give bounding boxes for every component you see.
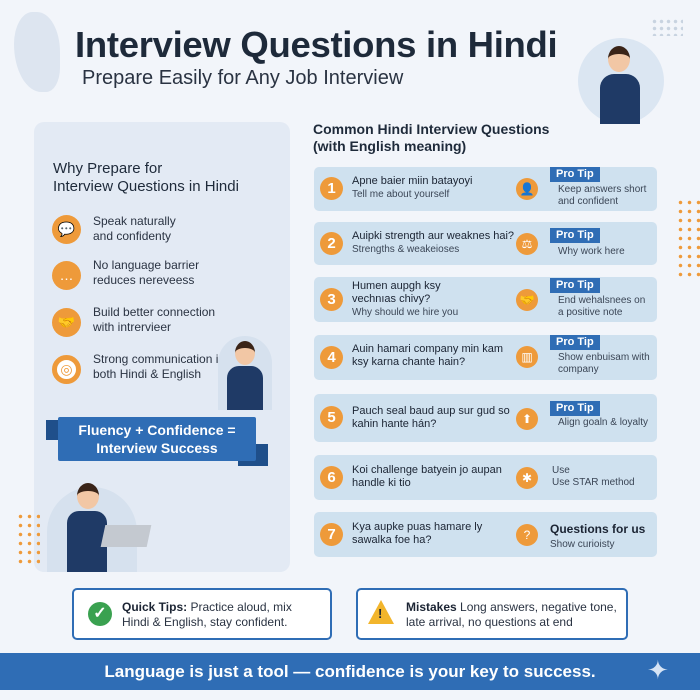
card 7: sawalka foe ha?: [352, 534, 432, 546]
card 3: Why should we hire you: [352, 307, 458, 318]
list item 2: [52, 258, 199, 290]
card 3: vechnıas chivy?: [352, 293, 430, 305]
card 6: Use STAR method: [552, 477, 635, 488]
banner: fluency + confidence: Fluency + Confidence =: [78, 422, 236, 438]
heading: common questions: Common Hindi Interview Questions: [313, 121, 549, 137]
card 3: 3: [327, 291, 336, 308]
card 1: Pro Tip: [556, 168, 594, 180]
icon: check: ✓: [93, 605, 107, 622]
illustration: woman presenter top right: [578, 38, 664, 124]
card 5: [314, 394, 657, 442]
list item 4: [52, 352, 225, 384]
card 4: Pro Tip: [556, 336, 594, 348]
card 2: Why work here: [558, 246, 625, 257]
card 7: Kya aupke puas hamare ly: [352, 521, 482, 533]
list item 1: 💬: [58, 221, 75, 237]
card 4: ▥: [521, 350, 533, 364]
card 6: 6: [327, 469, 336, 486]
icon: sparkle: ✦: [647, 655, 669, 685]
mistakes box: !: [378, 606, 382, 621]
card 1: 1: [327, 180, 336, 197]
subtitle: Prepare Easily for Any Job Interview: [82, 67, 403, 89]
quick tips box: [72, 588, 332, 640]
panel heading: Why Prepare for: [53, 160, 162, 177]
map shape top left: [14, 12, 60, 92]
card 4: company: [558, 364, 599, 375]
mistakes box: Mistakes Long answers, negative tone,: [406, 600, 617, 614]
card 5: ⬆: [522, 412, 532, 426]
dots decoration: [651, 18, 683, 36]
panel heading: [53, 160, 239, 195]
quick tips box: Quick Tips: Practice aloud, mix: [122, 600, 292, 614]
list item 4: Strong communication in: [93, 352, 225, 366]
illustration: man with laptop: [47, 487, 137, 572]
list item 3: Build better connection: [93, 305, 215, 319]
card 1: [314, 167, 657, 211]
panel heading: Interview Questions in Hindi: [53, 178, 239, 195]
list item 2: reduces nereveess: [93, 273, 194, 287]
banner: fluency + confidence: [46, 417, 268, 466]
card 7: ?: [524, 528, 530, 542]
card 6: ✱: [522, 471, 532, 485]
card 4: Show enbuisam with: [558, 352, 650, 363]
card 3: a positive note: [558, 307, 622, 318]
icon: check: [88, 602, 112, 626]
icon: warning: [368, 600, 394, 624]
mistakes box: late arrival, no questions at end: [406, 615, 573, 629]
card 2: ⚖: [522, 237, 532, 251]
card 2: Pro Tip: [556, 229, 594, 241]
card 6: handle ki tio: [352, 477, 411, 489]
card 2: [314, 222, 657, 265]
card 7: 7: [327, 526, 336, 543]
card 4: ksy karna chante hain?: [352, 356, 465, 368]
card 4: Auin hamari company min kam: [352, 343, 503, 355]
quick tips box: Hindi & English, stay confident.: [122, 615, 287, 629]
card 2: Strengths & weakeioses: [352, 244, 459, 255]
card 6: [314, 455, 657, 500]
list item 4: ◎: [60, 361, 73, 377]
list item 1: [52, 214, 176, 244]
list item 4: both Hindi & English: [93, 367, 201, 381]
card 5: Pauch seal baud aup sur gud so: [352, 405, 510, 417]
card 3: Humen aupgh ksy: [352, 280, 441, 292]
card 3: 🤝: [520, 293, 534, 307]
heading: common questions: (with English meaning): [313, 138, 466, 154]
list item 3: [52, 305, 215, 337]
card 5: Pro Tip: [556, 402, 594, 414]
card 1: 👤: [520, 182, 534, 196]
list item 2: No language barrier: [93, 258, 199, 272]
card 5: kahin hante hán?: [352, 418, 436, 430]
card 1: and confident: [558, 196, 618, 207]
card 3: [314, 277, 657, 322]
heading: common questions: [313, 121, 549, 154]
list item 1: and confidenty: [93, 229, 171, 243]
card 1: Keep answers short: [558, 184, 646, 195]
card 3: End wehalsnees on: [558, 295, 645, 306]
card 7: Questions for us: [550, 522, 645, 536]
mistakes box: [356, 588, 628, 640]
list item 2: …: [60, 267, 74, 283]
illustration: woman in panel: [218, 336, 272, 410]
card 6: Use: [552, 465, 570, 476]
card 4: 4: [327, 349, 336, 366]
footer banner: [0, 653, 700, 690]
card 5: 5: [327, 409, 336, 426]
title: Interview Questions in Hindi: [75, 24, 557, 65]
list item 1: Speak naturally: [93, 214, 176, 228]
card 2: 2: [327, 235, 336, 252]
list item 3: with intrervieer: [93, 320, 171, 334]
banner: fluency + confidence: Interview Success: [96, 440, 218, 456]
card 7: Show curioisty: [550, 539, 614, 550]
panel: why prepare: [34, 122, 290, 572]
card 1: Apne baier miin batayoyi: [352, 175, 472, 187]
card 5: Align goaln & loyalty: [558, 417, 648, 428]
card 1: Tell me about yourself: [352, 189, 449, 200]
card 3: Pro Tip: [556, 279, 594, 291]
footer banner: Language is just a tool — confidence is your key to success.: [104, 662, 596, 681]
card 7: [314, 512, 657, 557]
list item 3: 🤝: [58, 314, 75, 330]
card 2: Auipki strength aur weaknes hai?: [352, 230, 514, 242]
card 6: Koi challenge batyein jo aupan: [352, 464, 502, 476]
card 4: [314, 335, 657, 380]
